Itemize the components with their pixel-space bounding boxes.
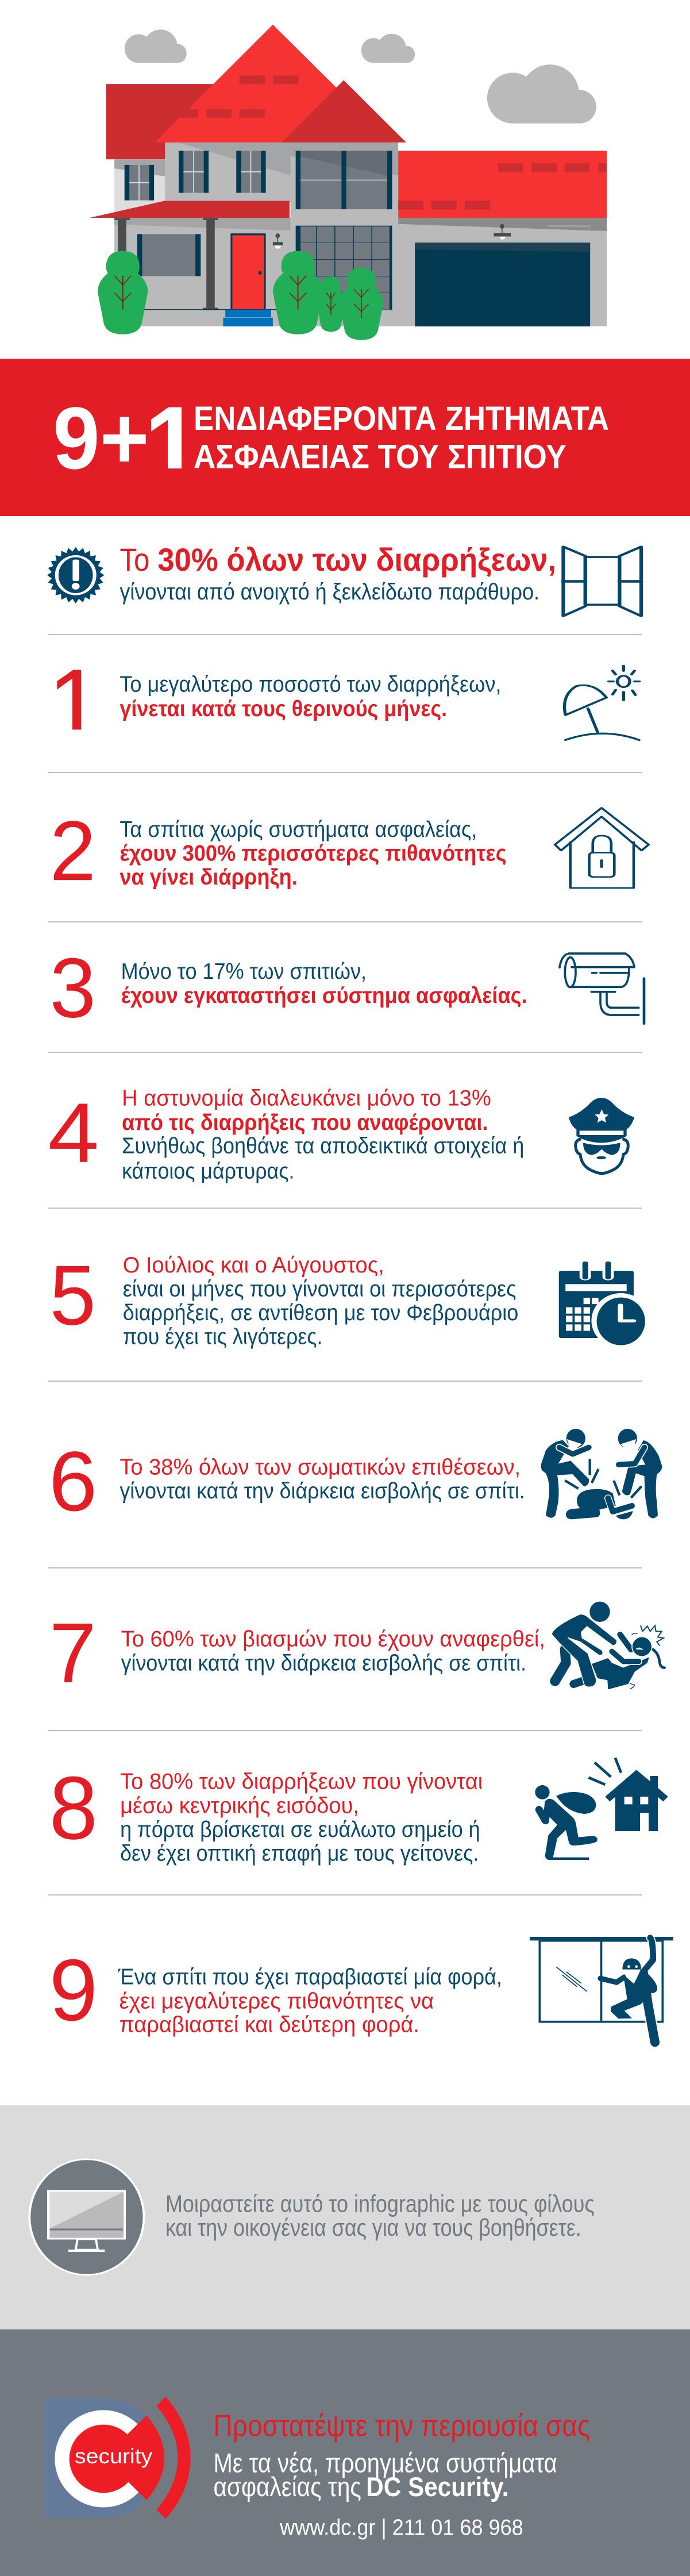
logo: DC security	[44, 2397, 191, 2519]
text: fact 7: Το 60% των βιασμών που έχουν αναφερθεί,	[121, 1626, 545, 1651]
floor line	[141, 309, 392, 310]
text: fact 6	[120, 1455, 525, 1504]
text: fact 5: που έχει τις λιγότερες.	[123, 1324, 322, 1349]
panel: fact 3	[50, 940, 644, 1035]
text: fact 8: δεν έχει οπτική επαφή με τους γείτονες.	[120, 1840, 479, 1866]
bush 2	[273, 251, 323, 335]
heading: title text	[194, 400, 609, 475]
panel: share band	[0, 2105, 690, 2329]
text: fact 7	[121, 1626, 545, 1675]
cloud middle	[361, 34, 415, 63]
panel: footer band	[0, 2329, 690, 2576]
dividers	[48, 634, 642, 1896]
number 9: 9	[49, 1941, 98, 2039]
text: footer message: ασφαλείας της	[213, 2472, 361, 2502]
door steps	[223, 310, 273, 326]
text: footer message	[213, 2409, 590, 2502]
panel: fact 1	[57, 664, 641, 741]
bush 1	[98, 251, 148, 335]
front door	[230, 233, 266, 310]
upper windows	[125, 151, 392, 209]
number 4: 4	[48, 1086, 99, 1180]
panel: fact 6	[49, 1434, 525, 1528]
lamp right	[494, 224, 511, 240]
icon: police officer	[569, 1098, 634, 1174]
bush 4	[340, 268, 383, 340]
panel: fact 7	[49, 1605, 545, 1700]
number 5: 5	[50, 1248, 96, 1343]
text: 30% headline: Το	[120, 543, 149, 578]
text: fact 2	[120, 817, 507, 889]
icon: attackers beating a victim	[541, 1429, 662, 1519]
icon: warning badge	[47, 547, 105, 603]
icon: beach umbrella and sun	[565, 666, 639, 740]
text: 30% headline	[120, 543, 556, 578]
text: fact 1	[120, 672, 501, 721]
panel: fact 9	[49, 1941, 502, 2039]
cloud right	[487, 64, 596, 124]
lamp left	[273, 233, 283, 249]
number 2: 2	[50, 803, 96, 898]
icon: calendar and clock	[559, 1263, 650, 1348]
number 7: 7	[49, 1605, 97, 1700]
garage roof	[398, 151, 607, 218]
number 3: 3	[50, 940, 96, 1035]
number 8: 8	[49, 1758, 98, 1858]
icon: assault on a woman	[552, 1602, 665, 1689]
grid window	[296, 226, 392, 310]
logo word: security: security	[75, 2444, 153, 2468]
porch columns	[114, 218, 218, 310]
panel: fact 2	[50, 803, 649, 898]
text: fact 3	[121, 959, 527, 1008]
text: website and phone: www.dc.gr | 211 01 68 968	[279, 2515, 523, 2540]
text: fact 9: έχει μεγαλύτερες πιθανότητες να	[120, 1988, 434, 2013]
left roof	[106, 84, 213, 159]
text: fact 9: παραβιαστεί και δεύτερη φορά.	[120, 2012, 419, 2037]
house walls	[114, 143, 607, 326]
text: fact 9: Ένα σπίτι που έχει παραβιαστεί μία φορά,	[117, 1964, 502, 1989]
icon: monitor in circle	[29, 2159, 144, 2275]
text: fact 8: μέσω κεντρικής εισόδου,	[120, 1793, 359, 1818]
text: fact 3: Μόνο το 17% των σπιτιών,	[121, 959, 367, 984]
panel: red title band	[0, 359, 690, 516]
text: fact 4	[122, 1086, 524, 1183]
garage door	[415, 243, 590, 326]
text: fact 8: Το 80% των διαρρήξεων που γίνονται	[120, 1768, 483, 1794]
text: fact 2: να γίνει διάρρηξη.	[120, 864, 298, 889]
icon: thief climbing through window	[530, 1937, 673, 2042]
text: fact 9	[117, 1964, 502, 2037]
icon: open window	[563, 547, 641, 616]
porch roof	[89, 201, 290, 218]
heading: 9+1: 1	[144, 383, 201, 507]
text: fact 4: κάποιος μάρτυρας.	[122, 1158, 294, 1183]
main roof	[155, 25, 406, 143]
panel: 30% open window fact	[47, 543, 641, 616]
icon: security camera	[560, 953, 644, 1024]
text: fact 8: η πόρτα βρίσκεται σε ευάλωτο σημείο ή	[120, 1816, 480, 1841]
panel: fact 4	[48, 1086, 634, 1183]
cloud left	[125, 29, 187, 63]
number 6: 6	[49, 1434, 97, 1528]
illustration: house with clouds	[89, 25, 607, 340]
icon: house with padlock	[555, 808, 649, 888]
text: footer message: DC Security.	[366, 2472, 508, 2502]
panel: fact 5	[50, 1248, 650, 1349]
text: fact 8	[120, 1768, 483, 1866]
porch window	[137, 234, 201, 276]
bush 3	[317, 276, 345, 332]
text: fact 5: Ο Ιούλιος και ο Αύγουστος,	[123, 1252, 384, 1278]
icon: burglar fleeing a house	[535, 1758, 668, 1860]
panel: fact 8	[49, 1758, 483, 1866]
text: share message	[165, 2190, 595, 2241]
heading: 9+1: 9+	[53, 389, 149, 487]
heading: 9+1	[56, 407, 182, 470]
number 1: 1	[48, 649, 102, 761]
text: fact 5	[123, 1252, 518, 1349]
